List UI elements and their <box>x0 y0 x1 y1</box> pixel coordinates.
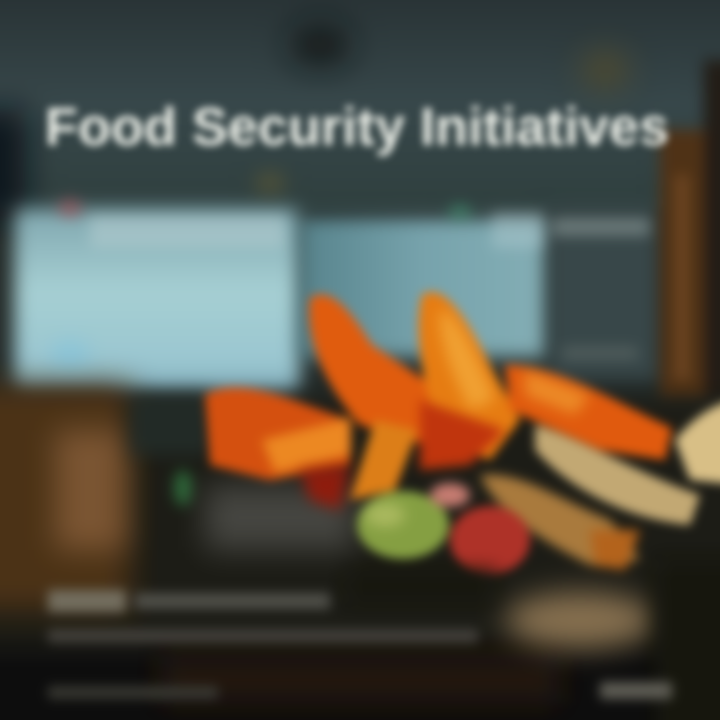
window panels <box>14 171 660 392</box>
footer text bars <box>48 590 672 699</box>
food: potatoes and bananas <box>480 400 720 570</box>
wooden post <box>660 60 720 400</box>
food: green and red vegetables <box>345 483 530 602</box>
title: Food Security Initiatives <box>45 97 669 157</box>
food: carrots <box>205 292 672 510</box>
lower table and shadows <box>0 385 720 720</box>
